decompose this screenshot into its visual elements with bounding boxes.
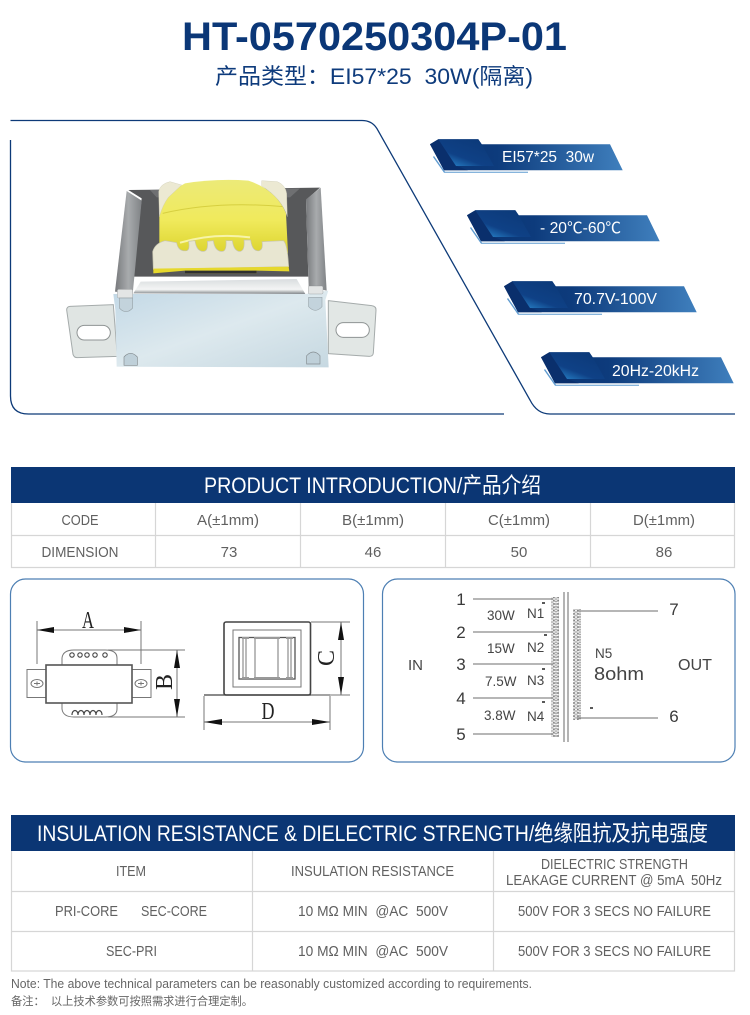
- row: dimension: DIMENSION: [42, 544, 118, 561]
- winding labels: 3.8W: [484, 708, 516, 723]
- arrows A and B: [37, 627, 180, 717]
- banner: temperature range: - 20℃-60℃: [540, 220, 621, 237]
- row: column titles: LEAKAGE CURRENT @ 5mA 50Hz: [506, 872, 722, 889]
- banner: temperature range: [467, 210, 660, 244]
- row: dimension: 46: [365, 544, 381, 561]
- winding labels: 7.5W: [485, 674, 517, 689]
- panel: product photo frame: [10, 120, 735, 414]
- front plate: [133, 279, 305, 294]
- secondary leads: [577, 611, 658, 718]
- table: product introduction: [11, 467, 735, 568]
- icon: transformer photo: [67, 180, 376, 367]
- panel: wiring schematic: [382, 579, 735, 762]
- bobbin ears: [159, 182, 182, 217]
- panel: dimension drawing: [10, 579, 364, 762]
- secondary coil: [573, 609, 581, 720]
- title: HT-0570250304P-01: [182, 15, 567, 59]
- table: insulation and dielectric strength: [11, 815, 735, 971]
- pin numbers: [456, 590, 679, 744]
- row: column titles: ITEM: [116, 863, 146, 880]
- pin numbers: 2: [456, 623, 466, 642]
- mounting tabs: [67, 301, 376, 358]
- front view: [204, 622, 350, 730]
- pin numbers: 1: [456, 590, 466, 609]
- row: pri-core sec-core: [55, 903, 711, 920]
- table header: [11, 815, 735, 851]
- row: sec-pri: [106, 943, 711, 960]
- yellow coil: [159, 180, 288, 253]
- bobbin front: [153, 240, 289, 269]
- row: sec-pri: SEC-PRI: [106, 943, 157, 960]
- table header: PRODUCT INTRODUCTION/产品介绍: [204, 473, 541, 498]
- pin numbers: 5: [456, 725, 466, 744]
- primary coil: [551, 597, 559, 737]
- row: column titles: [116, 856, 722, 889]
- label OUT: OUT: [678, 657, 713, 674]
- row: column titles: INSULATION RESISTANCE: [291, 863, 454, 880]
- label D: D: [262, 699, 274, 725]
- label C: C: [314, 650, 340, 666]
- row: dimension: 73: [221, 544, 237, 561]
- row: sec-pri: 10 MΩ MIN @AC 500V: [298, 943, 448, 960]
- row: code: CODE: [62, 512, 98, 529]
- pin numbers: 6: [669, 707, 679, 726]
- pin numbers: 7: [669, 600, 679, 619]
- note: english: Note: The above technical parameters can be reasonably customized according to requirements.: [11, 976, 532, 991]
- banner: frequency: 20Hz-20kHz: [612, 363, 699, 380]
- pin numbers: 4: [456, 689, 466, 708]
- row: code: [62, 512, 695, 529]
- row: column titles: DIELECTRIC STRENGTH: [541, 856, 688, 873]
- brackets: [115, 191, 142, 294]
- row: code: B(±1mm): [342, 512, 404, 529]
- transformer core: [564, 592, 568, 742]
- row: pri-core sec-core: 10 MΩ MIN @AC 500V: [298, 903, 448, 920]
- winding labels: N5: [595, 646, 612, 661]
- subtitle: product type: 产品类型：EI57*25 30W(隔离): [215, 64, 533, 89]
- winding labels: N4: [527, 709, 545, 724]
- row: dimension: [42, 544, 672, 561]
- row: code: C(±1mm): [488, 512, 550, 529]
- polarity dots: [542, 603, 593, 708]
- banner: EI57*25 30w: EI57*25 30w: [502, 149, 595, 166]
- row: dimension: 50: [511, 544, 527, 561]
- row: sec-pri: 500V FOR 3 SECS NO FAILURE: [518, 943, 711, 960]
- row: dimension: 86: [656, 544, 672, 561]
- row: pri-core sec-core: 500V FOR 3 SECS NO FAILURE: [518, 903, 711, 920]
- note: chinese: 备注： 以上技术参数可按照需求进行合理定制。: [11, 994, 253, 1008]
- pin numbers: 3: [456, 655, 466, 674]
- winding labels: N3: [527, 673, 544, 688]
- table header: [11, 467, 735, 503]
- primary leads: [473, 599, 553, 734]
- row: code: A(±1mm): [197, 512, 259, 529]
- label A: A: [82, 608, 94, 634]
- row: pri-core sec-core: PRI-CORE: [55, 903, 118, 920]
- winding labels: 30W: [487, 608, 515, 623]
- arrows C and D: [204, 622, 344, 725]
- banner: voltage: 70.7V-100V: [574, 291, 658, 308]
- banner: voltage: [504, 281, 697, 315]
- core: [128, 188, 320, 277]
- winding labels: 15W: [487, 641, 515, 656]
- label B: B: [152, 674, 178, 690]
- label IN: IN: [408, 657, 423, 674]
- winding labels: N2: [527, 640, 544, 655]
- winding labels: 8ohm: [594, 664, 644, 684]
- top view: [27, 621, 185, 717]
- banner: EI57*25 30w: [430, 139, 623, 173]
- banner: frequency: [541, 352, 734, 386]
- winding labels: [484, 606, 644, 724]
- row: code: D(±1mm): [633, 512, 695, 529]
- winding labels: N1: [527, 606, 544, 621]
- row: pri-core sec-core: SEC-CORE: [141, 903, 207, 920]
